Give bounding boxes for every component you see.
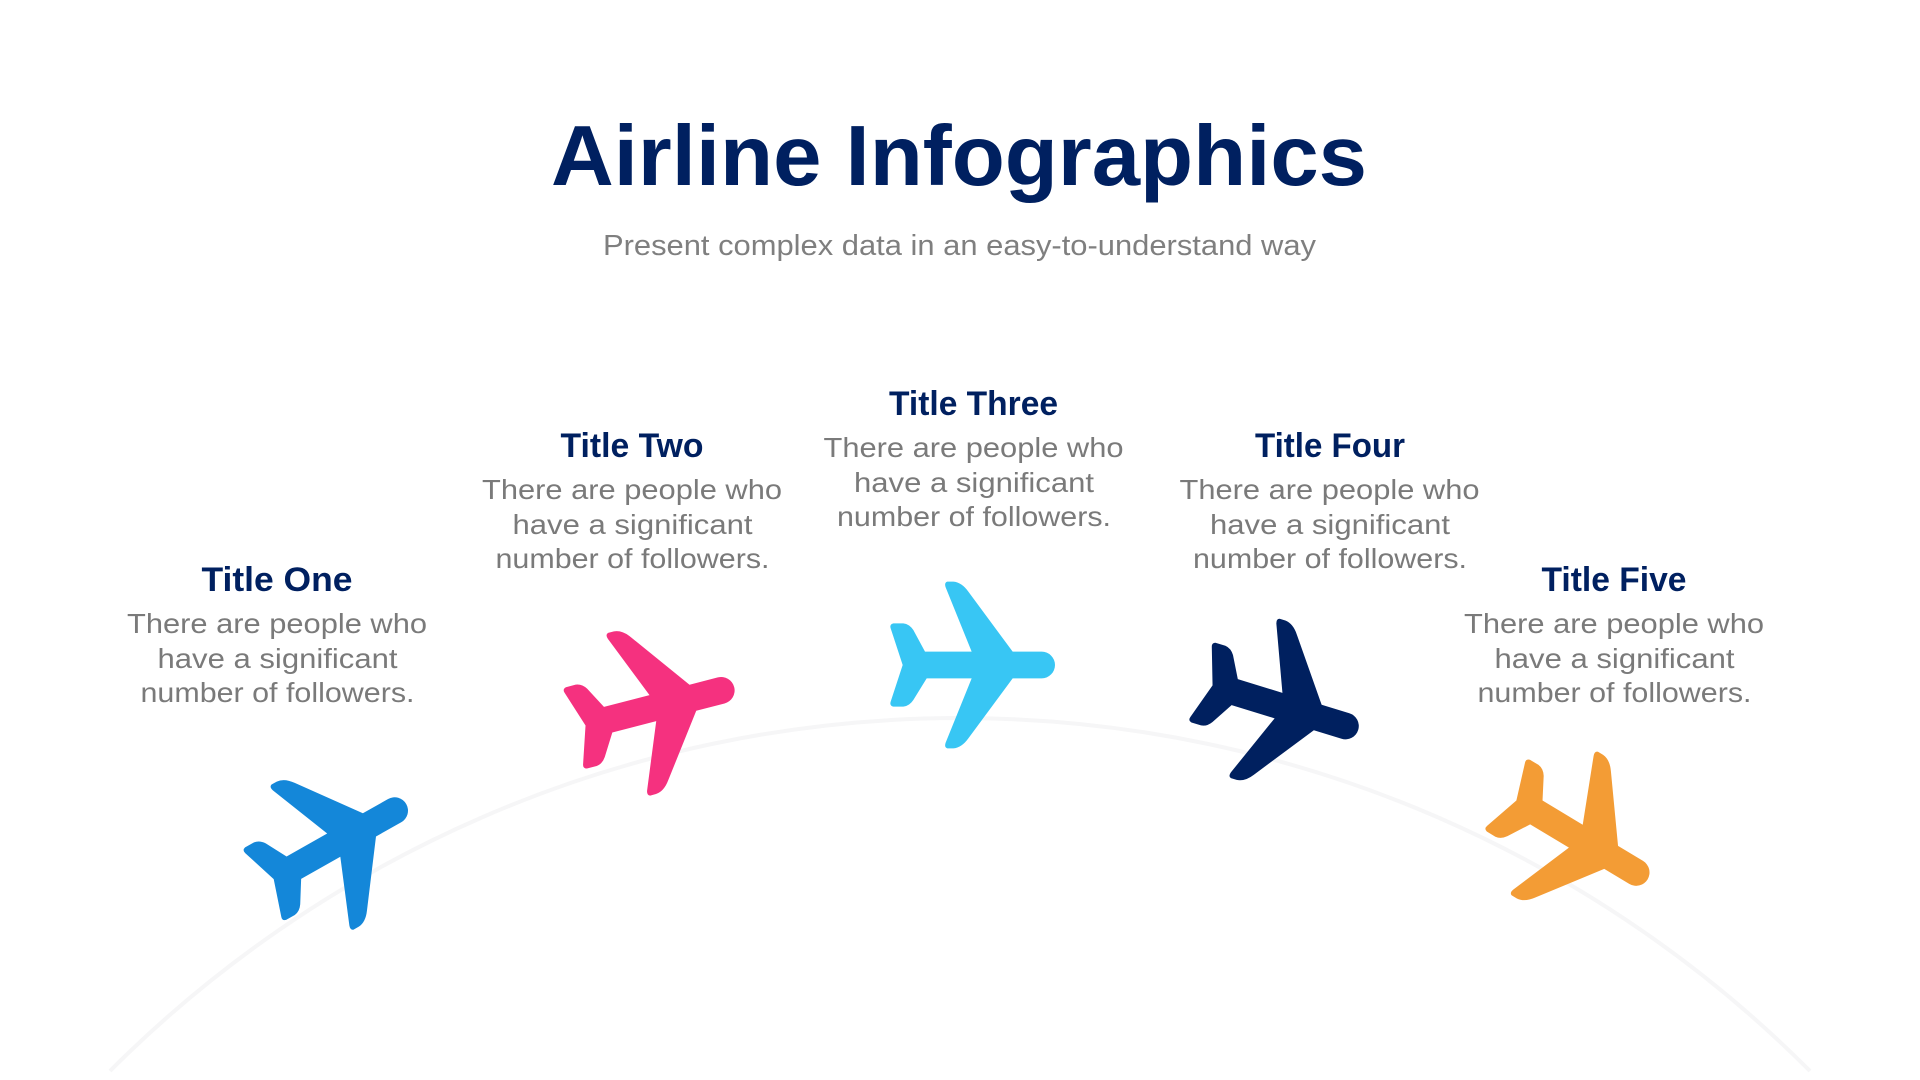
text block: title two — [482, 474, 782, 574]
icon: pink plane — [552, 606, 755, 810]
icon: orange plane — [1463, 722, 1691, 951]
text block: title two: number of followers. — [496, 543, 770, 574]
text block: title three: There are people who — [824, 432, 1124, 463]
heading: title five: Title Five — [1542, 561, 1686, 599]
panel: title four — [1180, 427, 1480, 574]
icon: navy plane — [1176, 602, 1383, 810]
text block: title five: There are people who — [1464, 608, 1764, 639]
text block: title four: number of followers. — [1193, 543, 1467, 574]
panel: title five — [1464, 561, 1764, 708]
text block: title two: There are people who — [482, 474, 782, 505]
text block: title two: have a significant — [512, 509, 753, 540]
flight arc — [110, 718, 1810, 1071]
panel: title three — [824, 385, 1124, 532]
panel: title one — [127, 561, 427, 708]
text block: title three: have a significant — [854, 467, 1094, 498]
text block: title five: number of followers. — [1478, 677, 1752, 708]
heading: title three: Title Three — [889, 385, 1058, 423]
icon: cyan plane — [890, 582, 1055, 748]
text block: title four — [1180, 474, 1480, 574]
text block: title one: have a significant — [158, 643, 398, 674]
subtitle: Present complex data in an easy-to-understand way — [603, 230, 1317, 262]
text block: title four: There are people who — [1180, 474, 1480, 505]
text block: title five — [1464, 608, 1764, 708]
icon: blue plane — [222, 732, 447, 958]
title: Airline Infographics — [551, 109, 1367, 204]
heading: title four: Title Four — [1255, 427, 1405, 465]
text block: title five: have a significant — [1494, 643, 1735, 674]
text block: title one: number of followers. — [140, 677, 414, 708]
text block: title four: have a significant — [1210, 509, 1450, 540]
text block: title three: number of followers. — [837, 501, 1111, 532]
heading: title two: Title Two — [560, 427, 704, 465]
heading: title one: Title One — [202, 561, 352, 599]
text block: title three — [824, 432, 1124, 532]
text block: title one: There are people who — [127, 608, 427, 639]
text block: title one — [127, 608, 427, 708]
panel: title two — [482, 427, 782, 574]
